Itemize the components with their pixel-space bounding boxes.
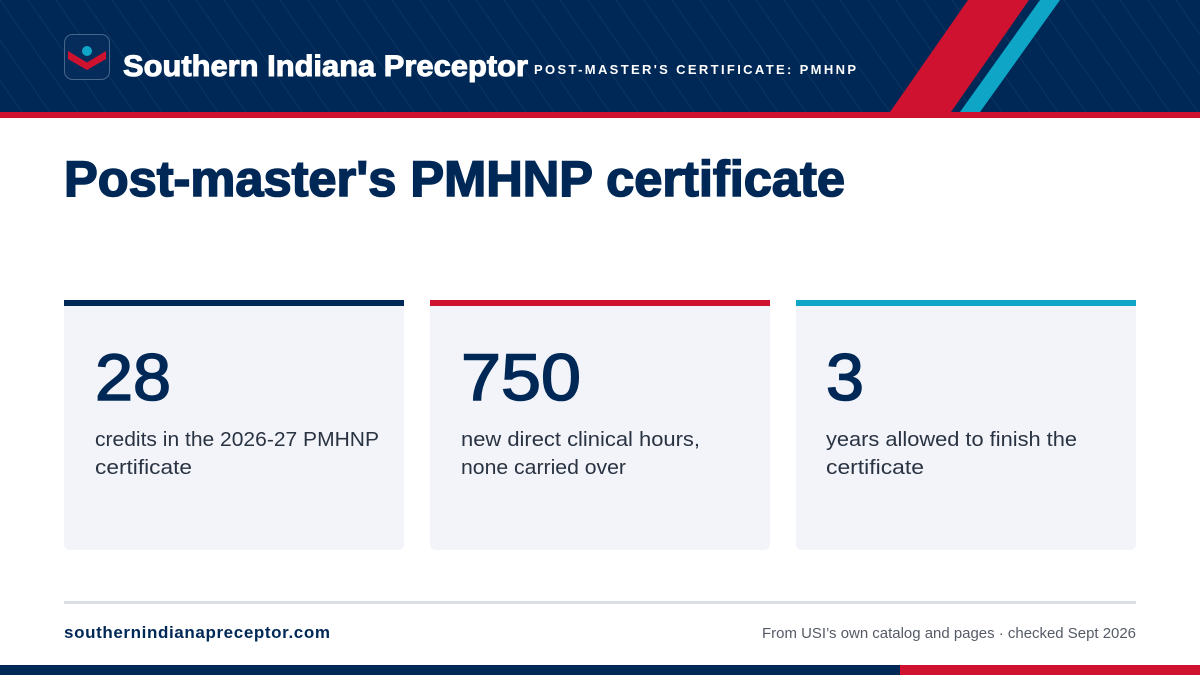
header band: [0, 0, 1200, 118]
stat: 28: 28: [95, 340, 171, 414]
credits description: [95, 429, 379, 479]
brand name: Southern Indiana Preceptor: [123, 50, 528, 83]
panel: credits: [64, 300, 404, 550]
panel: years: [796, 300, 1136, 550]
bottom colour bar: [0, 665, 1200, 675]
header subtitle: POST-MASTER'S CERTIFICATE: PMHNP: [534, 62, 856, 77]
footer website: southernindianapreceptor.com: [64, 623, 330, 642]
years description: [826, 429, 1077, 479]
red header rule: [0, 112, 1200, 118]
credits description: credits in the 2026-27 PMHNP: [95, 429, 379, 451]
red diagonal stripe: [890, 0, 1029, 112]
stat: 3: 3: [826, 340, 864, 414]
footer source note: From USI’s own catalog and pages · checked Sept 2026: [762, 626, 1136, 642]
hours description: new direct clinical hours,: [461, 429, 700, 451]
stat: 750: 750: [461, 340, 581, 414]
hours description: none carried over: [461, 457, 626, 479]
title: Post-master's PMHNP certificate: [64, 151, 845, 207]
teal diagonal stripe: [960, 0, 1060, 112]
panel: clinical hours: [430, 300, 770, 550]
credits description: certificate: [95, 457, 192, 479]
icon: logo chevron badge: [64, 34, 110, 80]
years description: years allowed to finish the: [826, 429, 1077, 451]
hours description: [461, 429, 700, 479]
years description: certificate: [826, 457, 924, 479]
